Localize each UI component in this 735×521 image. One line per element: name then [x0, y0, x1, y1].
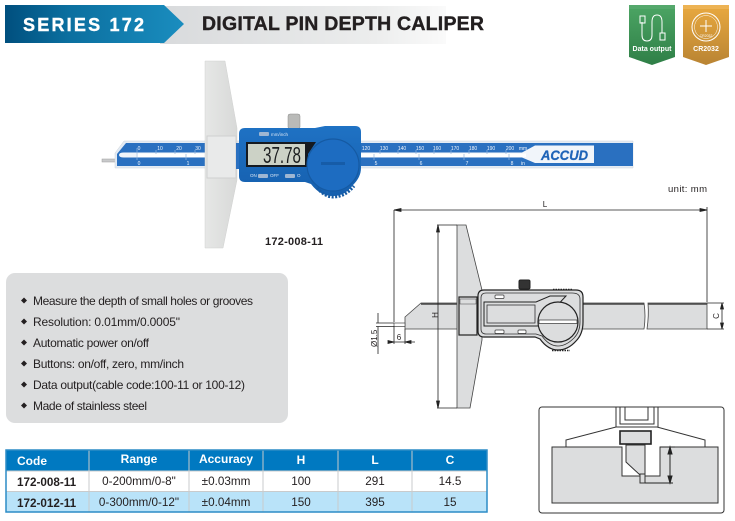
scale numbers: 120 [362, 146, 370, 152]
row 172-012-11: 172-012-11 [17, 497, 77, 510]
badge: data output: Data output [633, 46, 672, 53]
table heading row: Range [121, 452, 158, 466]
scale numbers: 190 [487, 146, 495, 152]
title: DIGITAL PIN DEPTH CALIPER [202, 13, 484, 35]
scale numbers: 130 [380, 146, 388, 152]
workpiece [552, 447, 718, 503]
scale numbers: mm [519, 146, 527, 152]
row 172-012-11: 395 [365, 496, 385, 509]
scale numbers: 0 [138, 161, 141, 167]
on/off and zero buttons: ON [250, 173, 257, 178]
row 172-012-11: ±0.04mm [202, 496, 250, 509]
dimension pin diameter: Ø1.5 [370, 329, 379, 347]
scale numbers: 170 [451, 146, 459, 152]
on/off and zero buttons: OFF [270, 173, 279, 178]
locking knob [288, 114, 300, 129]
feature list: Data output(cable code:100-11 or 100-12) [33, 378, 245, 392]
scale numbers: 200 [506, 146, 514, 152]
dimension pin length [388, 326, 415, 344]
row 172-012-11: 15 [443, 496, 457, 509]
slot end marker [598, 149, 633, 161]
depth dimension [645, 447, 675, 483]
badge: CR2032 battery: CR2032 [700, 34, 712, 38]
table heading row: H [297, 453, 305, 467]
scale numbers: 7 [466, 161, 469, 167]
inset frame [539, 407, 724, 513]
row 172-008-11: ±0.03mm [202, 475, 250, 488]
mm/inch button [259, 132, 269, 136]
badge: data output [629, 5, 675, 65]
unit note: unit: mm [668, 184, 707, 195]
lcd reading: 37.78 [263, 142, 301, 168]
feature list: Automatic power on/off [33, 336, 150, 350]
dimension C: C [712, 313, 721, 319]
row 172-012-11: 150 [291, 496, 311, 509]
scale beam [115, 141, 633, 168]
row 172-008-11: 100 [291, 475, 311, 488]
series label: SERIES 172 [23, 15, 144, 35]
scale numbers: 30 [195, 146, 201, 152]
scale numbers: 180 [469, 146, 477, 152]
scale numbers: 1 [187, 161, 190, 167]
row 172-008-11 [17, 475, 462, 489]
scale numbers: 5 [375, 161, 378, 167]
buttons [495, 295, 504, 298]
slider block [459, 297, 477, 335]
scale numbers: 8 [511, 161, 514, 167]
scale numbers: 20 [176, 146, 182, 152]
table heading row: Accuracy [199, 452, 253, 466]
row 172-008-11: 14.5 [439, 475, 462, 488]
lcd screen [248, 144, 305, 165]
product photo: caliper: mm/inch [271, 132, 288, 137]
depth base [205, 61, 237, 248]
row 172-012-11: 0-300mm/0-12" [99, 496, 179, 509]
base shoulders [566, 427, 705, 447]
table heading row: L [371, 453, 379, 467]
dial teeth [317, 186, 354, 197]
knob [519, 280, 530, 289]
brand logo: ACCUD [540, 147, 588, 163]
dimension pin diameter [370, 313, 394, 354]
table heading row: Code [17, 454, 47, 468]
scale numbers: 140 [398, 146, 406, 152]
lcd bezel [246, 142, 316, 167]
slider block [207, 136, 236, 178]
feature list: Made of stainless steel [33, 399, 147, 413]
row 172-008-11: 172-008-11 [17, 476, 77, 489]
probe pin [394, 323, 405, 326]
feature list [33, 294, 253, 413]
title background band [160, 6, 446, 44]
feature list: Resolution: 0.01mm/0.0005" [33, 315, 180, 329]
teeth [552, 290, 573, 350]
second row fill [6, 492, 487, 512]
feature list: Buttons: on/off, zero, mm/inch [33, 357, 184, 371]
technical drawing [370, 200, 724, 408]
dial [307, 139, 359, 191]
table: specifications [6, 450, 487, 512]
series arrow [5, 5, 184, 43]
rod and pin [626, 445, 645, 475]
body outline [478, 290, 583, 350]
scale numbers [138, 146, 527, 167]
feature list: Measure the depth of small holes or grooves [33, 294, 253, 308]
lcd window [484, 296, 566, 326]
panel: features [6, 273, 288, 423]
inset: depth measurement diagram [539, 407, 724, 513]
depth base [457, 225, 482, 408]
badge: CR2032 battery [683, 5, 729, 65]
on/off and zero buttons: O [297, 173, 301, 178]
bullet markers [21, 298, 27, 408]
row 172-012-11 [17, 496, 457, 510]
scale numbers: 150 [416, 146, 424, 152]
clamp block [620, 431, 651, 444]
product photo: caliper [102, 61, 633, 248]
row 172-008-11: 291 [365, 475, 385, 488]
dimension L [394, 200, 707, 322]
model label: 172-008-11 [265, 236, 323, 248]
row 172-008-11: 0-200mm/0-8" [102, 475, 176, 488]
table heading row [17, 452, 455, 468]
table header [6, 450, 487, 471]
scale ticks [137, 148, 509, 160]
column [616, 407, 658, 427]
table heading row: C [446, 453, 455, 467]
display body [239, 126, 361, 196]
dimension H [431, 225, 457, 408]
beam slot [119, 146, 594, 163]
dimension C [707, 303, 724, 329]
scale numbers: 0 [138, 146, 141, 152]
dimension pin length: 6 [397, 333, 402, 342]
dimension H: H [431, 312, 440, 318]
scale numbers: 6 [420, 161, 423, 167]
on/off and zero buttons [250, 173, 301, 178]
probe pin [102, 159, 116, 162]
scale numbers: 10 [157, 146, 163, 152]
dial [538, 302, 578, 342]
beam outline [405, 303, 645, 329]
dimension L: L [543, 200, 548, 209]
badge: CR2032 battery: CR2032 [693, 46, 719, 53]
scale numbers: in [521, 161, 525, 167]
header banner [5, 5, 484, 44]
scale numbers: 160 [433, 146, 441, 152]
